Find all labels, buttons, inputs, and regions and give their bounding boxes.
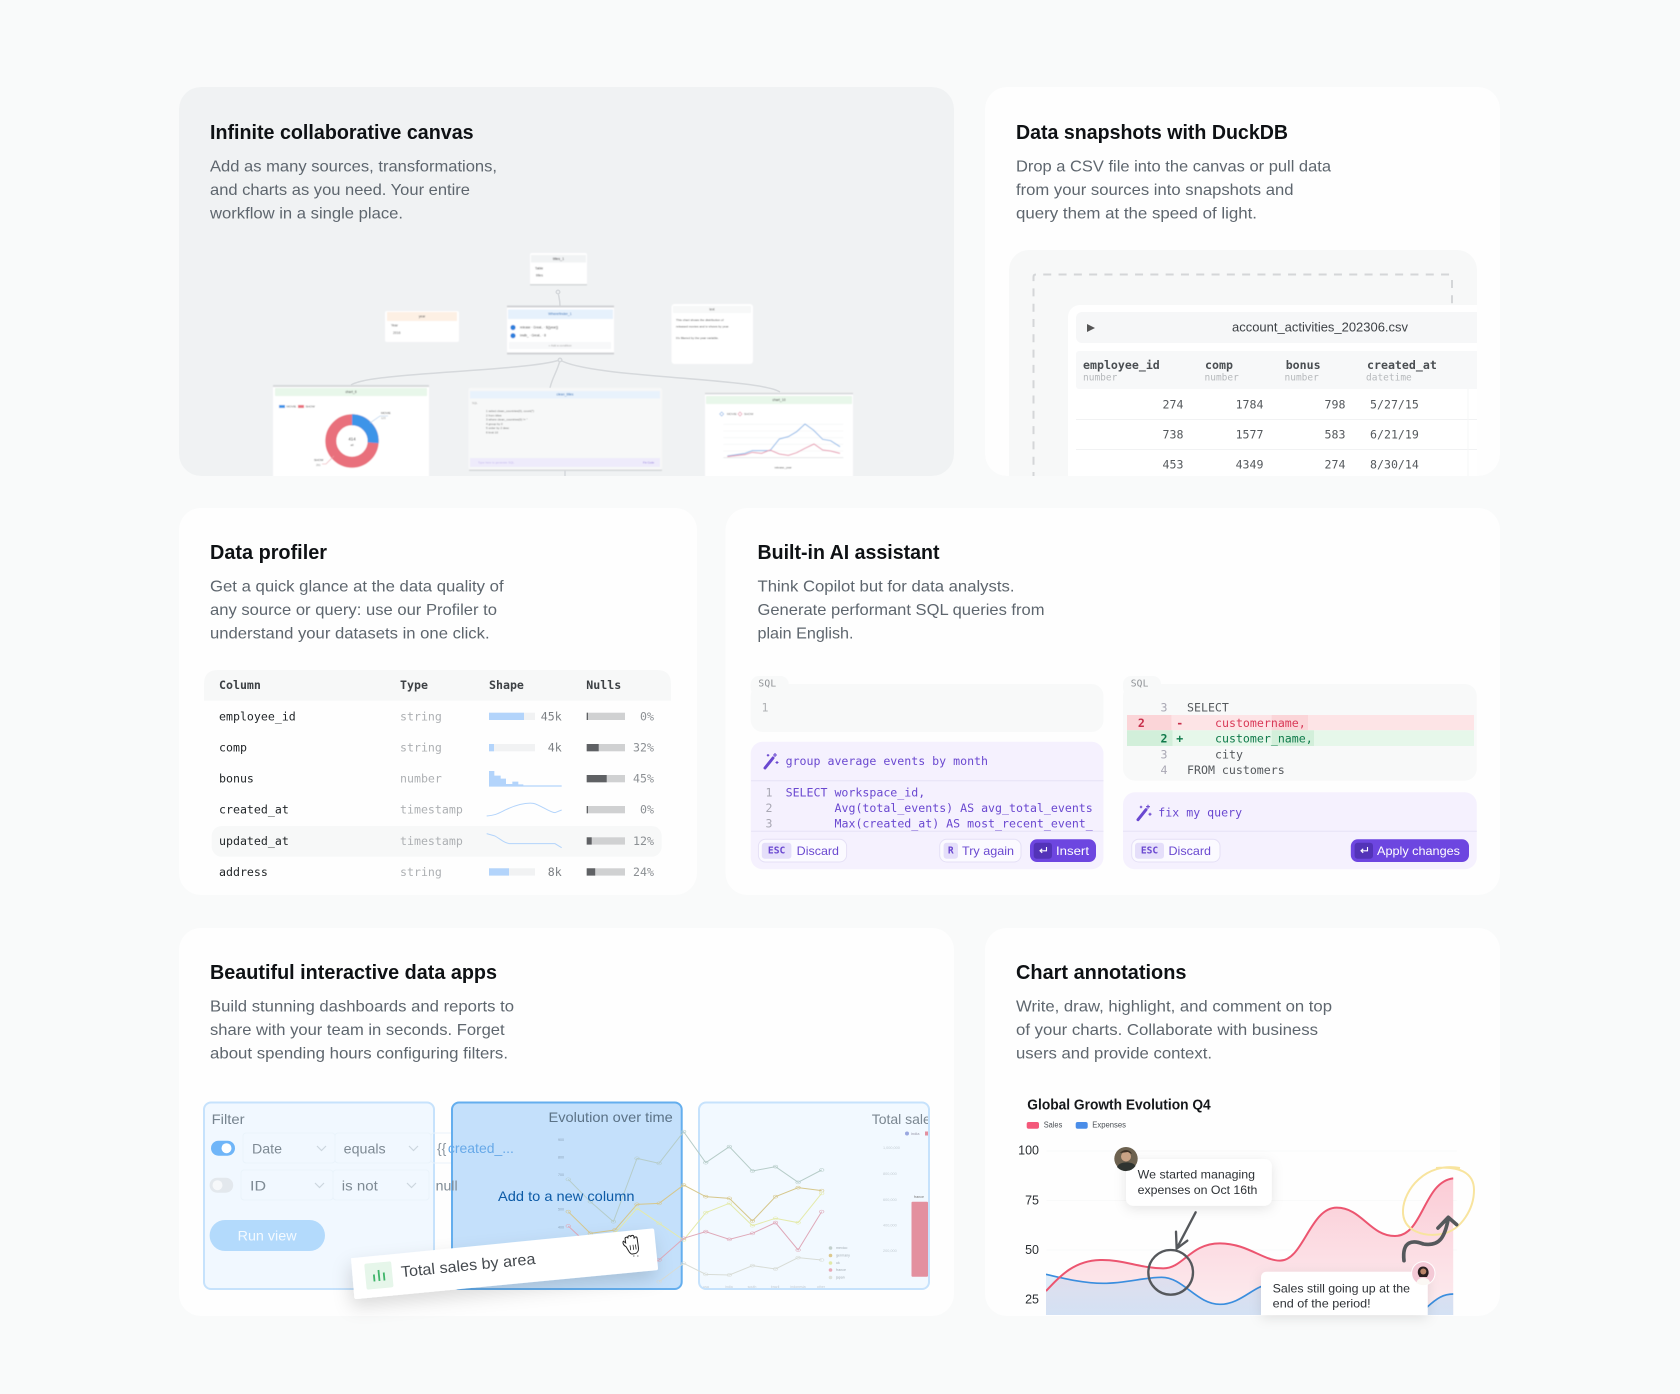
chart panel: Total sales: france	[836, 1268, 846, 1272]
node: where filter: release · Great.. · ${{year}}	[520, 326, 558, 330]
button: Run view: Run view	[238, 1228, 297, 1244]
node: SQL query: 6 limit 10	[486, 430, 498, 434]
button: ESC Discard: Discard	[797, 844, 839, 858]
button: ESC Discard: ESC	[1141, 846, 1158, 856]
node: where filter: imdb_ · Great.. · 8	[520, 334, 546, 338]
table header: Column	[219, 678, 261, 692]
AI prompt: group average events	[751, 742, 1104, 869]
node: line chart	[705, 393, 853, 484]
table rows: 1577	[1236, 427, 1264, 441]
area chart: sales and expenses	[1046, 1177, 1454, 1315]
chart panel: Total sales: indonesia	[790, 1285, 806, 1289]
node: donut chart	[273, 385, 429, 481]
chart panel: Total sales: india	[725, 1285, 733, 1289]
chart panel: Total sales: germany	[836, 1254, 850, 1258]
node: donut chart: all	[350, 443, 354, 447]
chart panel: Evolution over time: 500	[558, 1208, 564, 1212]
text block: snapshots description: query them at the speed of light.	[1016, 206, 1257, 222]
icon: magic wand	[765, 753, 778, 768]
y axis labels: 75	[1025, 1194, 1039, 1208]
drop hint: Add to a new column: Add to a new column	[498, 1188, 634, 1204]
chart panel: Evolution over time: 400	[558, 1226, 564, 1230]
filter panel: equals	[344, 1140, 386, 1156]
callout: expenses note: We started managing	[1138, 1167, 1255, 1181]
dragged card: Total sales by area	[351, 1228, 658, 1299]
button: ESC Discard: Discard	[1168, 844, 1211, 858]
SQL editor: diff	[1123, 676, 1477, 781]
chart legend: Expenses	[1092, 1121, 1126, 1130]
chart panel: Total sales: south	[748, 1285, 756, 1289]
node: SQL query: SQL	[472, 401, 478, 405]
nulls column: 0%	[640, 709, 654, 723]
button: Try again: R	[948, 846, 954, 856]
chart panel: Total sales: 200,000	[883, 1249, 897, 1253]
node: donut chart: SHOW	[306, 404, 315, 408]
SQL editor: diff: customername,	[1215, 716, 1306, 730]
text block: annotations description: users and provide context.	[1016, 1046, 1212, 1062]
filter panel: Date	[252, 1140, 282, 1156]
table header: number	[1204, 372, 1239, 384]
text block: data apps description: about spending hours configuring filters.	[210, 1046, 508, 1062]
node: text note	[672, 304, 753, 364]
node: year input: Year	[391, 324, 399, 328]
SQL editor: diff: 2	[1138, 716, 1145, 730]
chart panel: Total sales: 400,000	[883, 1224, 897, 1228]
generated SQL: SELECT workspace_id,	[786, 786, 925, 800]
chart panel: Evolution over time: 700	[558, 1173, 564, 1177]
icon: grab hand cursor	[622, 1235, 639, 1255]
table rows: 5/27/15	[1370, 397, 1419, 411]
column names and types: string	[400, 741, 442, 755]
SQL editor: empty	[751, 676, 1104, 732]
column names and types: number	[400, 772, 442, 786]
generated SQL: 3	[766, 816, 773, 830]
node: donut chart: MOVIE	[381, 411, 391, 415]
SQL editor: diff: customer_name,	[1215, 731, 1313, 745]
SQL editor: diff: SELECT	[1187, 701, 1229, 715]
chart panel: Total sales: india	[911, 1131, 920, 1136]
text block: annotations description	[1016, 998, 1332, 1062]
chart panel: Total sales: uk	[836, 1261, 840, 1265]
text block: AI description: Think Copilot but for data analysts.	[758, 578, 1014, 596]
table header	[1084, 360, 1436, 380]
node: table source: titles	[536, 274, 543, 278]
node: donut chart: chart_6	[345, 390, 357, 394]
CSV snapshot table	[1084, 322, 1436, 470]
panel: Chart annotations	[1016, 964, 1475, 1320]
callout: sales note: end of the period!	[1273, 1296, 1371, 1310]
text block: snapshots description	[1016, 158, 1331, 222]
table rows: 8/30/14	[1370, 457, 1419, 471]
chart legend: Sales	[1044, 1121, 1062, 1130]
table header: datetime	[1366, 372, 1412, 384]
node: where filter	[507, 306, 614, 354]
panel: Beautiful interactive data apps	[203, 964, 930, 1309]
button: ESC Discard	[758, 839, 847, 862]
text block: snapshots description: from your sources into snapshots and	[1016, 182, 1294, 199]
node: SQL query: 5 order by 2 desc	[486, 426, 510, 430]
node: line chart: release_year	[774, 466, 792, 470]
SQL editor: diff: 2	[1161, 731, 1168, 745]
chart panel: Total sales: Total sales	[872, 1111, 938, 1127]
shape column: 4k	[548, 741, 562, 755]
generated SQL: Max(created_at) AS most_recent_event_	[834, 816, 1093, 830]
SQL editor: diff: 3	[1161, 748, 1168, 762]
text block: AI description: Generate performant SQL queries from	[758, 602, 1044, 619]
table header: created_at	[1367, 358, 1437, 373]
nulls column: 32%	[633, 741, 654, 755]
filter panel: is not	[342, 1177, 378, 1193]
filter panel	[204, 1102, 522, 1289]
button: ESC Discard	[1132, 839, 1220, 862]
node: text note: This chart shows the distribution of	[676, 318, 724, 322]
button: Try again	[940, 839, 1021, 862]
input values over chart: created_...	[448, 1140, 514, 1156]
shape column: 8k	[548, 865, 562, 879]
node: text note: It's filtered by the year variable.	[676, 336, 719, 340]
shape column: 45k	[541, 709, 562, 723]
table header: number	[1083, 372, 1118, 384]
chart panel: Total sales	[699, 1102, 938, 1289]
file header bar	[1076, 312, 1486, 343]
node: SQL query: 3 where clean_countries(0) != ''	[486, 418, 528, 422]
node: SQL query: clean_titles	[557, 393, 574, 397]
y axis labels: 100	[1018, 1144, 1039, 1158]
generated SQL: 1	[766, 786, 773, 800]
AI prompt: group average events: group average events by month	[786, 754, 988, 768]
chart panel: Evolution over time: Evolution over time	[548, 1109, 673, 1125]
heading: Data snapshots with DuckDB: Data snapshots with DuckDB	[1016, 122, 1288, 144]
table header: bonus	[1286, 358, 1321, 372]
annotation: hand-drawn circle and arrow	[1148, 1212, 1196, 1295]
avatar: man	[1114, 1147, 1138, 1171]
text block: AI description: plain English.	[758, 626, 854, 642]
text block: profiler description: understand your datasets in one click.	[210, 626, 490, 642]
SQL editor: diff: 4	[1161, 763, 1168, 777]
text block: snapshots description: Drop a CSV file into the canvas or pull data	[1016, 158, 1331, 176]
table rows: 4349	[1236, 457, 1264, 471]
input values over chart: {{	[437, 1140, 447, 1156]
text block: AI description	[758, 578, 1044, 642]
input values over chart: null	[436, 1177, 458, 1193]
highlighted row background	[212, 826, 662, 857]
SQL editor: diff: -	[1176, 716, 1183, 730]
node: SQL query: 2 from titles	[486, 413, 502, 417]
button: Insert	[1030, 839, 1096, 862]
SQL editor: diff: SQL	[1131, 678, 1149, 690]
text block: canvas description: Add as many sources, transformations,	[210, 158, 497, 176]
node: donut chart: SHOW	[314, 458, 324, 462]
file header bar: account_activities_202306.csv	[1232, 320, 1409, 334]
nulls column: 24%	[633, 865, 654, 879]
y axis labels: 25	[1025, 1292, 1039, 1306]
chart panel: Total sales: other	[817, 1285, 826, 1289]
heading: Chart annotations: Chart annotations	[1016, 962, 1186, 984]
chart panel: Evolution over time	[452, 1102, 682, 1289]
annotation: yellow highlight scribble	[1403, 1167, 1474, 1235]
nulls column: 12%	[633, 834, 654, 848]
button: Try again: Try again	[962, 844, 1014, 858]
table header: Type	[400, 678, 428, 692]
table rows: 453	[1163, 457, 1184, 471]
chart panel: Evolution over time: 900	[558, 1138, 564, 1142]
text block: annotations description: of your charts. Collaborate with business	[1016, 1022, 1318, 1039]
column names and types	[219, 709, 463, 879]
column names and types: timestamp	[400, 803, 463, 817]
node: donut chart: 291	[316, 463, 321, 467]
node: donut chart: 414	[348, 436, 356, 442]
text block: canvas description	[209, 158, 497, 222]
table header: employee_id	[1083, 358, 1160, 373]
column names and types: employee_id	[219, 709, 296, 723]
callout: sales note	[1261, 1262, 1435, 1316]
AI prompt: fix my query: fix my query	[1158, 806, 1242, 820]
node: text note: text	[709, 308, 715, 312]
panel: Data snapshots with DuckDB	[1016, 124, 1453, 476]
table rows: 6/21/19	[1370, 427, 1419, 441]
filter inputs row backgrounds	[241, 1133, 522, 1200]
text block: annotations description: Write, draw, highlight, and comment on top	[1016, 998, 1332, 1016]
node: table source	[530, 253, 587, 286]
table rows: 274	[1325, 457, 1346, 471]
chart panel: Total sales: japan	[835, 1276, 845, 1280]
node connectors	[351, 290, 780, 476]
SQL editor: empty: 1	[762, 701, 769, 715]
node: text note: released movies and tv shows by year.	[676, 324, 729, 328]
chart panel: Total sales: brazil	[771, 1285, 779, 1289]
chart legend	[1027, 1121, 1126, 1130]
node: donut chart: 123	[381, 416, 386, 420]
y axis labels: 50	[1025, 1243, 1039, 1257]
text block: canvas description: and charts as you need. Your entire	[210, 182, 470, 199]
toggle on	[211, 1141, 235, 1156]
node: line chart: chart_10	[772, 398, 786, 402]
node: SQL query	[468, 388, 662, 471]
callout: expenses note	[1114, 1147, 1272, 1206]
generated SQL: Avg(total_events) AS avg_total_events	[834, 801, 1093, 815]
node: year input: year	[419, 314, 426, 318]
table header	[204, 670, 671, 701]
table header: Shape	[489, 678, 524, 692]
chart panel: Evolution over time: 800	[558, 1156, 564, 1160]
table header: number	[1284, 372, 1319, 384]
table header: Nulls	[586, 678, 621, 692]
callout: sales note: Sales still going up at the	[1273, 1281, 1410, 1295]
text block: data apps description	[210, 998, 514, 1062]
SQL editor: diff: +	[1176, 731, 1183, 745]
node: line chart: MOVIE	[727, 412, 737, 416]
filter panel: ID	[250, 1177, 266, 1193]
table rows: 738	[1163, 427, 1184, 441]
donut	[331, 420, 373, 462]
button: Apply changes: Apply changes	[1377, 844, 1460, 858]
table rows: 583	[1325, 427, 1346, 441]
table rows: 1784	[1236, 397, 1264, 411]
heading: Beautiful interactive data apps: Beautiful interactive data apps	[210, 962, 497, 984]
chart panel: Total sales: usa	[703, 1285, 709, 1289]
line chart across panels	[568, 1132, 822, 1282]
nulls column	[587, 709, 654, 879]
text block: data apps description: Build stunning dashboards and reports to	[210, 998, 514, 1016]
node: where filter: Wherefinder_1	[548, 312, 572, 316]
profiler table	[204, 670, 671, 879]
annotation: squiggle arrow	[1404, 1217, 1457, 1261]
AI prompt: fix my query	[1123, 792, 1477, 869]
y axis labels	[1018, 1144, 1039, 1306]
table rows: 274	[1163, 397, 1184, 411]
panel: Built-in AI assistant	[726, 508, 1500, 895]
table rows	[1163, 397, 1419, 471]
heading: Data profiler: Data profiler	[210, 542, 327, 564]
generated SQL: 2	[766, 801, 772, 815]
filter panel: Filter	[212, 1111, 245, 1127]
SQL editor: diff: FROM customers	[1187, 763, 1285, 777]
text block: profiler description: Get a quick glance at the data quality of	[210, 578, 504, 596]
column names and types: string	[400, 865, 442, 879]
dragged card: Total sales by area: Total sales by area	[400, 1251, 537, 1281]
text block: profiler description	[210, 578, 504, 642]
icon: magic wand	[1138, 805, 1152, 820]
table rows: 798	[1325, 397, 1346, 411]
text block: canvas description: workflow in a single place.	[209, 206, 403, 222]
button: Run view	[210, 1220, 325, 1251]
column names and types: string	[400, 709, 442, 723]
node: year input	[385, 311, 459, 342]
column names and types: comp	[219, 741, 247, 755]
column names and types: bonus	[219, 772, 254, 786]
toggle off	[210, 1178, 233, 1193]
shape column	[487, 709, 562, 879]
node: donut chart: MOVIE	[286, 404, 296, 408]
heading: Built-in AI assistant: Built-in AI assistant	[758, 542, 940, 564]
text block: data apps description: share with your team in seconds. Forget	[210, 1022, 505, 1039]
nulls column: 45%	[633, 772, 654, 786]
button: Apply changes	[1351, 839, 1469, 862]
chart panel: Total sales: 600,000	[883, 1198, 897, 1202]
chart panel: Total sales: 800,000	[883, 1172, 897, 1176]
generated SQL	[766, 786, 1093, 830]
heading: Infinite collaborative canvas: Infinite collaborative canvas	[210, 122, 474, 144]
node: line chart: SHOW	[744, 412, 754, 416]
SQL editor: empty: SQL	[758, 678, 776, 690]
chart title: Global Growth Evolution Q4	[1027, 1098, 1211, 1114]
button: ESC Discard: ESC	[768, 846, 785, 856]
button: Insert: Insert	[1056, 844, 1090, 858]
text block: profiler description: any source or query: use our Profiler to	[210, 602, 497, 619]
drop zone	[1032, 274, 1477, 476]
SQL editor: diff: city	[1215, 748, 1243, 762]
node: table source: Table	[535, 266, 543, 270]
node: where filter: + Add a condition	[548, 344, 572, 348]
SQL editor: diff: 3	[1161, 701, 1168, 715]
avatar: woman	[1412, 1262, 1435, 1285]
node: table source: titles_1	[553, 257, 564, 261]
panel: Data profiler	[179, 508, 697, 895]
column names and types: updated_at	[219, 834, 289, 848]
panel: Infinite collaborative canvas	[179, 87, 954, 484]
table header: comp	[1205, 358, 1233, 372]
chart panel: Total sales: 1,000,000	[883, 1146, 900, 1150]
chart panel: Total sales: france	[914, 1195, 924, 1199]
node: SQL query: 4 group by 0	[486, 422, 503, 426]
column names and types: timestamp	[400, 834, 463, 848]
nulls column: 0%	[640, 803, 654, 817]
callout: expenses note: expenses on Oct 16th	[1138, 1183, 1257, 1197]
column names and types: created_at	[219, 803, 289, 817]
icon: green chart	[364, 1261, 394, 1290]
node: year input: 2016	[393, 331, 401, 335]
column names and types: address	[219, 865, 268, 879]
chart panel: Total sales: mexico	[836, 1246, 847, 1250]
node: SQL query: Type here to generate SQL	[478, 460, 515, 464]
input values over chart	[436, 1140, 514, 1193]
node: SQL query: 1 select clean_countries(0), count(*)	[486, 409, 534, 413]
node: SQL query: Fix Code	[643, 460, 655, 464]
